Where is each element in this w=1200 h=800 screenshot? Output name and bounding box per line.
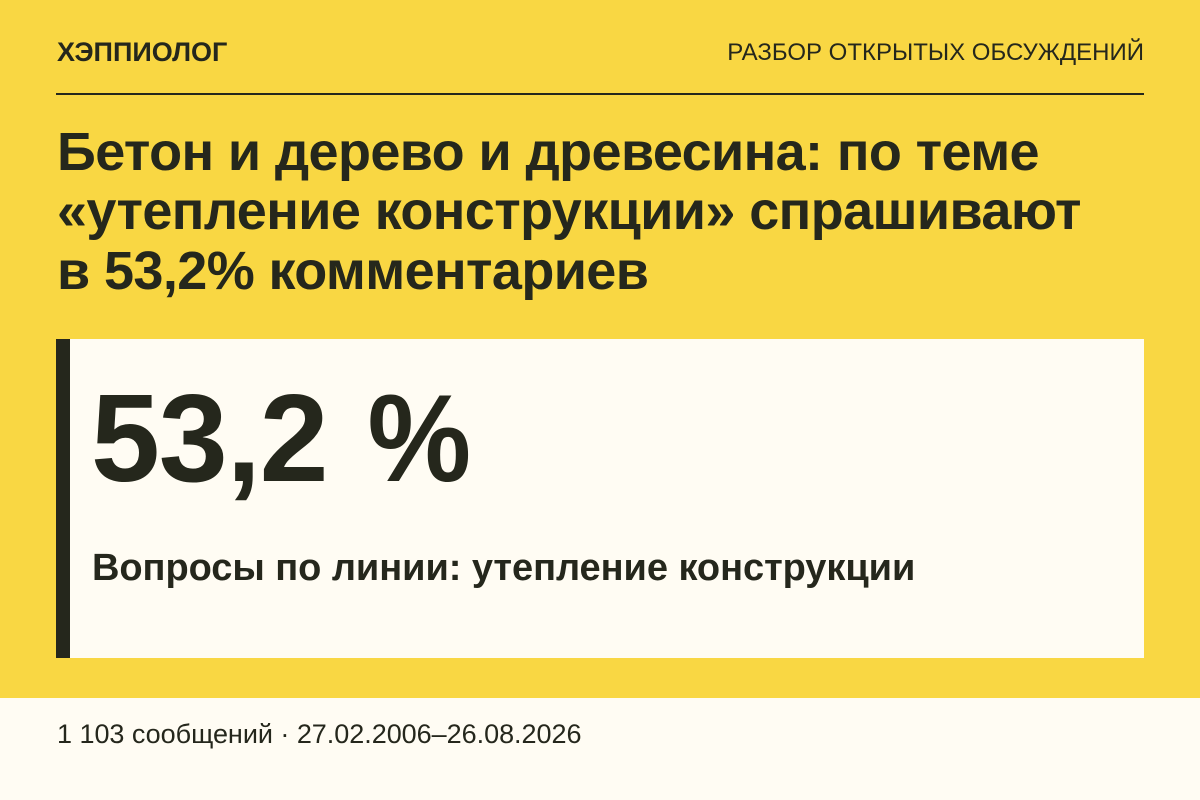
footer text: 1 103 сообщений · 27.02.2006–26.08.2026: [57, 719, 581, 749]
title: [57, 122, 1081, 301]
big number: 53,2: [91, 370, 327, 508]
header caption: РАЗБОР ОТКРЫТЫХ ОБСУЖДЕНИЙ: [727, 39, 1144, 66]
big number: %: [367, 370, 470, 508]
title: «утепление конструкции» спрашивают: [57, 181, 1081, 241]
header rule: [56, 93, 1144, 95]
panel: key statistic: [56, 339, 1144, 658]
big number: [91, 370, 470, 508]
statistic label: Вопросы по линии: утепление конструкции: [92, 547, 915, 589]
footer band: [0, 698, 1200, 800]
brand name: ХЭППИОЛОГ: [57, 37, 227, 67]
title: Бетон и дерево и древесина: по теме: [57, 122, 1039, 182]
title: в 53,2% комментариев: [57, 241, 648, 301]
